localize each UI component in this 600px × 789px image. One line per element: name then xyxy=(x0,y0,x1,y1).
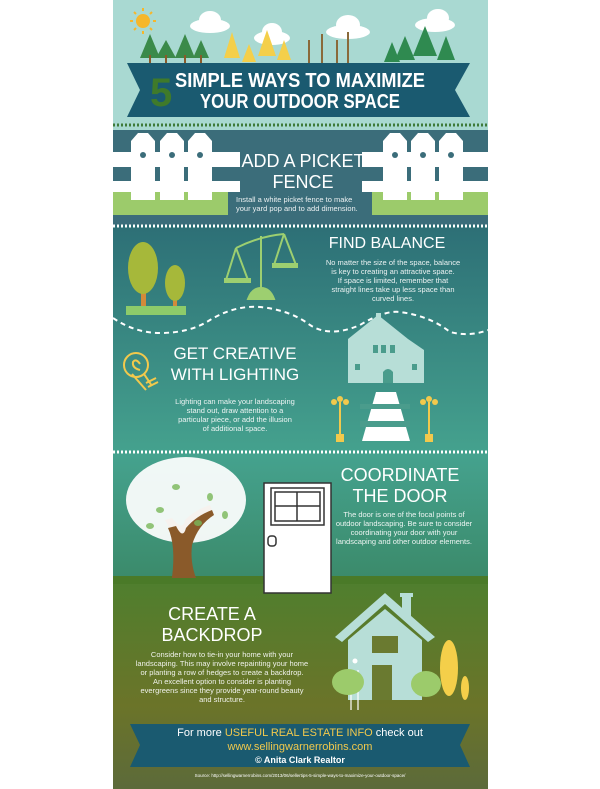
text: balance description: straight lines take up less space than xyxy=(332,285,454,294)
text: backdrop description: Consider how to tie-in your home with your xyxy=(151,650,294,659)
footer banner xyxy=(130,724,470,767)
heading: coordinate the door xyxy=(341,465,459,506)
text: backdrop description: or planting a row of hedges to create a backdrop. xyxy=(140,668,304,677)
text: backdrop description: and structure. xyxy=(199,695,245,704)
text: door description xyxy=(336,510,473,546)
text: balance description: is key to creating an attractive space. xyxy=(331,267,455,276)
text: balance description: If space is limited, remember that xyxy=(338,276,449,285)
heading: get creative with lighting: WITH LIGHTING xyxy=(171,365,299,384)
fence right xyxy=(362,133,488,215)
text: backdrop description: An excellent option to consider is planting xyxy=(153,677,291,686)
icon: leafy tree xyxy=(126,457,246,578)
text: door description: outdoor landscaping. Be sure to consider xyxy=(336,519,473,528)
fence left xyxy=(113,133,240,215)
icon: house being painted xyxy=(332,593,469,710)
title banner: YOUR OUTDOOR SPACE xyxy=(200,91,400,113)
icon: manor house with path and lamps xyxy=(331,313,438,442)
heading: add a picket fence: FENCE xyxy=(272,172,334,192)
text: fence description: Install a white picket fence to make xyxy=(236,195,352,204)
icon: two trees xyxy=(126,242,186,315)
text: backdrop description: landscaping. This may involve repainting your home xyxy=(136,659,308,668)
background sky xyxy=(113,0,488,130)
icon: lightbulb xyxy=(124,353,158,390)
text: lighting description: of additional space. xyxy=(203,424,267,433)
icon: sun xyxy=(130,8,156,34)
heading: find balance: FIND BALANCE xyxy=(329,235,445,252)
text: backdrop description xyxy=(136,650,308,704)
source: Source: http://sellingwarnerrobins.com/2013/06/sellertips-5-simple-ways-to-maximize-your-outdoor-space/ xyxy=(195,773,406,778)
heading: create a backdrop xyxy=(161,604,263,645)
text: lighting description: Lighting can make your landscaping xyxy=(175,397,295,406)
text: lighting description xyxy=(175,397,295,433)
text: lighting description: particular piece, or add the illusion xyxy=(178,415,292,424)
text: balance description: No matter the size of the space, balance xyxy=(326,258,460,267)
text: door description: landscaping and other outdoor elements. xyxy=(336,537,472,546)
heading: create a backdrop: CREATE A xyxy=(168,604,256,624)
heading: create a backdrop: BACKDROP xyxy=(161,625,263,645)
trees row xyxy=(140,26,455,64)
icon: white door xyxy=(264,483,331,593)
heading: get creative with lighting: GET CREATIVE xyxy=(173,344,297,363)
clouds xyxy=(190,9,455,45)
footer banner: For more USEFUL REAL ESTATE INFO check out xyxy=(177,727,423,739)
text: balance description xyxy=(326,258,460,303)
title banner: SIMPLE WAYS TO MAXIMIZE xyxy=(175,70,425,92)
heading: coordinate the door: COORDINATE xyxy=(341,465,459,485)
heading: get creative with lighting xyxy=(171,344,299,384)
heading: coordinate the door: THE DOOR xyxy=(352,486,448,506)
text: door description: coordinating your door with your xyxy=(351,528,458,537)
heading: add a picket fence xyxy=(241,151,365,192)
wavy dashed line xyxy=(113,307,488,334)
text: lighting description: stand out, draw attention to a xyxy=(187,406,284,415)
text: fence description: your yard pop and to add dimension. xyxy=(236,204,358,213)
title banner xyxy=(127,63,470,117)
footer banner: © Anita Clark Realtor xyxy=(255,755,345,765)
title banner: 5 xyxy=(150,71,172,115)
text: door description: The door is one of the focal points of xyxy=(343,510,466,519)
text: backdrop description: evergreens since they provide year-round beauty xyxy=(140,686,304,695)
text: balance description: curved lines. xyxy=(372,294,414,303)
footer banner: www.sellingwarnerrobins.com xyxy=(227,741,372,753)
text: fence description xyxy=(236,195,358,213)
icon: balance scale xyxy=(225,234,297,299)
heading: add a picket fence: ADD A PICKET xyxy=(241,151,365,171)
